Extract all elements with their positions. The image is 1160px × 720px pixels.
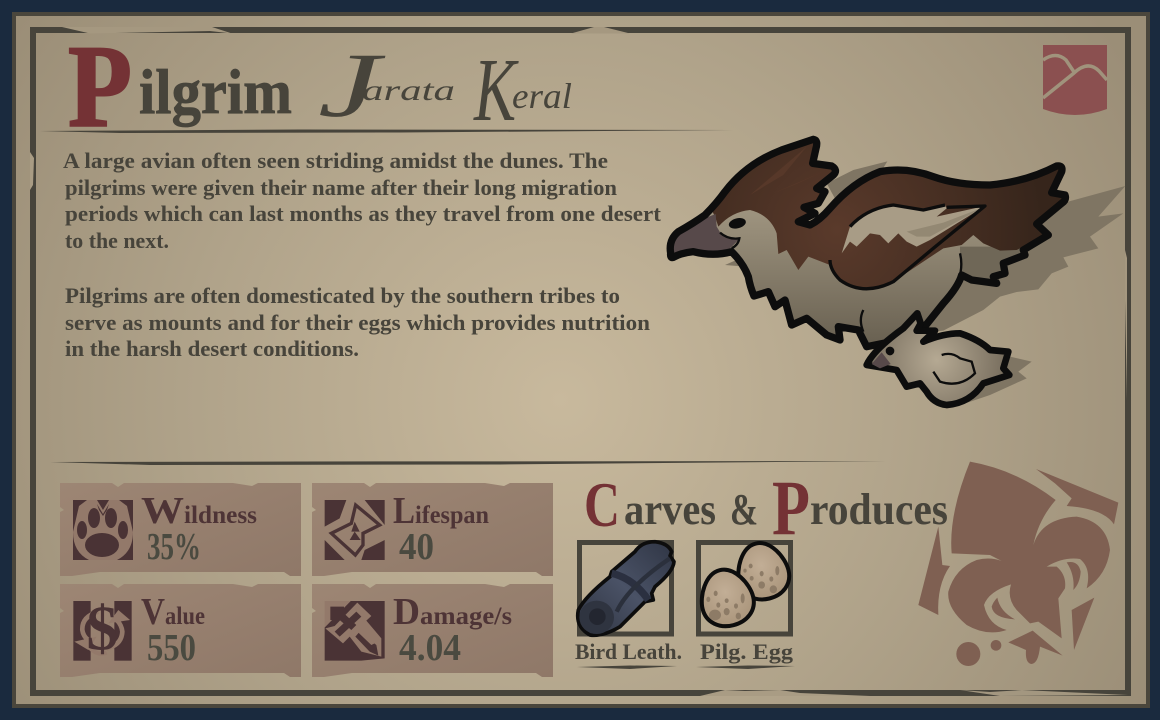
chick [867, 313, 1009, 405]
icon: coin [73, 593, 132, 663]
stat panel: lifespan: L [393, 490, 415, 532]
stat panel: damage per second: D [393, 591, 420, 633]
title: Pilgrim: ilgrim [139, 56, 292, 127]
heading: carves and produces: P [772, 464, 810, 551]
description text: in the harsh desert conditions. [65, 336, 359, 361]
description text: A large avian often seen striding amidst the dunes. The [63, 148, 608, 173]
stat panel: damage per second [312, 584, 553, 677]
scientific name signature [318, 34, 572, 140]
heading: carves and produces: & [730, 485, 758, 534]
item: pilgrim egg: Pilg. Egg [700, 639, 793, 664]
description text: pilgrims were given their name after their long migration [65, 175, 617, 200]
stat panel: lifespan: 40 [399, 526, 434, 568]
stat panel: value: alue [165, 603, 205, 630]
heading: carves and produces: roduces [810, 485, 948, 534]
icon: eggs [695, 537, 794, 631]
stat panel: wildness [60, 483, 301, 576]
title: Pilgrim [68, 21, 292, 152]
stat panel: wildness: 35% [147, 526, 201, 568]
heading rule [40, 130, 733, 133]
heading: carves and produces: C [584, 469, 620, 540]
description text [63, 148, 662, 361]
bird body [666, 136, 1070, 350]
icon: paw [73, 500, 133, 560]
heading: carves and produces [584, 464, 948, 551]
scientific name signature: J [318, 34, 386, 136]
icon: leather roll [578, 542, 674, 635]
icon: sword [325, 601, 385, 661]
icon: coin: $ [86, 593, 118, 663]
scientific name signature: eral [512, 76, 572, 116]
stat panel: wildness: W [141, 490, 184, 532]
item: bird leather [575, 542, 682, 669]
bird shadow [725, 161, 1125, 404]
description text: to the next. [65, 228, 169, 253]
description text: serve as mounts and for their eggs which provides nutrition [65, 310, 650, 335]
illustration: pilgrim bird and chick [663, 120, 1125, 405]
stat panel: damage per second: 4.04 [399, 627, 461, 669]
watermark: fleur-de-lis [918, 462, 1118, 666]
description text: periods which can last months as they travel from one desert [65, 201, 662, 226]
stat panel: lifespan [312, 483, 553, 576]
title: Pilgrim: P [68, 21, 132, 152]
stat panel: lifespan: ifespan [415, 502, 489, 529]
stat panel: value: 550 [147, 627, 196, 669]
icon: hourglass [325, 500, 385, 560]
item: bird leather: Bird Leath. [575, 639, 682, 664]
description text: Pilgrims are often domesticated by the southern tribes to [65, 283, 620, 308]
stat panel: value [60, 584, 301, 677]
scientific name signature: arata [362, 74, 455, 107]
item: pilgrim egg [695, 537, 795, 669]
divider rule [50, 461, 886, 465]
scientific name signature: K [473, 41, 519, 140]
stat panel: value: V [141, 591, 165, 633]
emblem: mountains [1043, 45, 1107, 115]
heading: carves and produces: arves [624, 485, 716, 534]
stat panel: damage per second: amage/s [420, 603, 512, 630]
stat panel: wildness: ildness [184, 502, 257, 529]
